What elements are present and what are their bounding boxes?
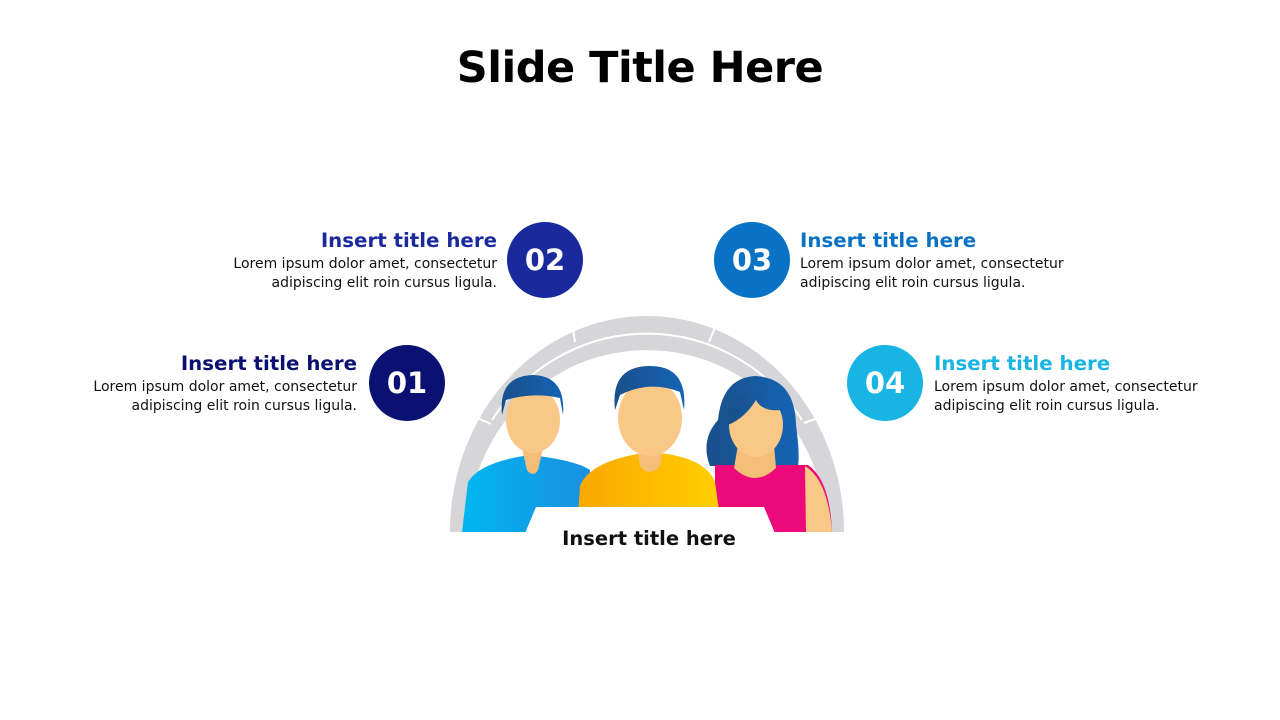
person right [706, 376, 832, 532]
circle 03: 03 [732, 243, 772, 277]
circle 04 [847, 345, 923, 421]
text block 03: Lorem ipsum dolor amet, consectetur [800, 256, 1064, 272]
text block 03: adipiscing elit roin cursus ligula. [800, 275, 1025, 291]
text block 03: Insert title here [800, 229, 976, 252]
circle 01: 01 [387, 366, 427, 400]
text block 01: Insert title here [181, 352, 357, 375]
text block 04: Insert title here [934, 352, 1110, 375]
text block 01: Lorem ipsum dolor amet, consectetur [93, 379, 357, 395]
circle 02: 02 [525, 243, 565, 277]
circle 02 [507, 222, 583, 298]
text block 02 [233, 229, 497, 291]
text block 02: Insert title here [321, 229, 497, 252]
circle 04: 04 [865, 366, 905, 400]
text block 04: adipiscing elit roin cursus ligula. [934, 398, 1159, 414]
label banner [518, 507, 782, 550]
person center [577, 366, 722, 532]
circle 03 [714, 222, 790, 298]
text block 04 [934, 352, 1198, 414]
label banner: Insert title here [562, 527, 736, 550]
text block 04: Lorem ipsum dolor amet, consectetur [934, 379, 1198, 395]
person left [462, 375, 590, 532]
text block 02: Lorem ipsum dolor amet, consectetur [233, 256, 497, 272]
title: Slide Title Here [457, 43, 823, 93]
text block 01: adipiscing elit roin cursus ligula. [132, 398, 357, 414]
text block 02: adipiscing elit roin cursus ligula. [272, 275, 497, 291]
text block 01 [93, 352, 357, 414]
arc [450, 315, 844, 532]
circle 01 [369, 345, 445, 421]
text block 03 [800, 229, 1064, 291]
